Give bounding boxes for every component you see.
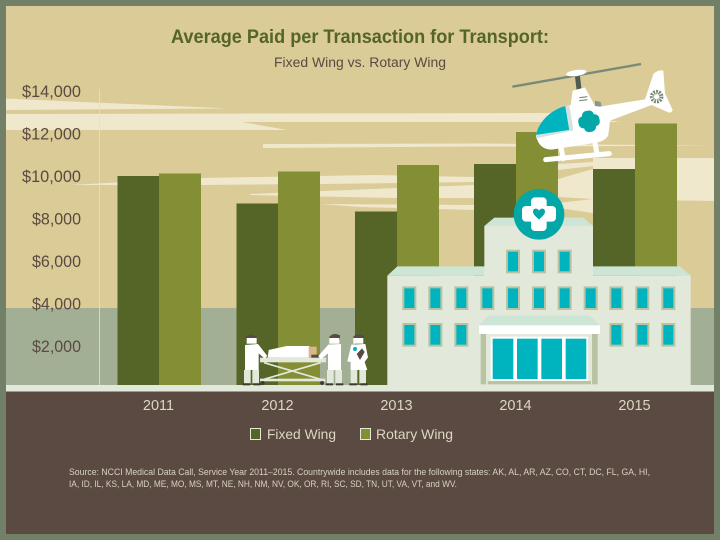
y axis labels: $8,000 — [32, 210, 81, 228]
legend: Fixed Wing — [267, 426, 336, 442]
stretcher — [260, 358, 326, 385]
hospital windows — [402, 250, 675, 347]
brown footer panel — [6, 392, 714, 534]
legend: Rotary Wing — [376, 426, 453, 442]
subtitle: Fixed Wing vs. Rotary Wing — [274, 55, 446, 70]
bar chart — [118, 124, 677, 385]
source note: Source: NCCI Medical Data Call, Service Year 2011–2015. Countrywide includes data for the following states: AK, AL, AR, AZ, CO, CT, DC, FL, GA, HI, — [69, 467, 650, 477]
source note: IA, ID, IL, KS, LA, MD, ME, MO, MS, MT, NE, NH, NM, NV, OK, OR, RI, SC, SD, TN, UT, VA, VT, and WV. — [69, 479, 457, 489]
helicopter cross — [577, 109, 601, 134]
title: Average Paid per Transaction for Transport: — [171, 26, 549, 48]
ground strip — [6, 385, 714, 392]
y axis labels: $2,000 — [32, 338, 81, 356]
hospital entrance — [479, 316, 600, 384]
legend — [250, 426, 453, 442]
y axis line — [98, 89, 100, 385]
helicopter — [512, 64, 673, 160]
x axis year labels — [143, 398, 651, 414]
medical team with stretcher — [243, 334, 368, 385]
source note — [69, 467, 650, 489]
y axis labels: $10,000 — [22, 168, 81, 186]
doctor with clipboard — [347, 334, 368, 385]
y axis labels: $4,000 — [32, 296, 81, 314]
x axis year labels: 2014 — [499, 398, 532, 414]
x axis year labels: 2013 — [380, 398, 413, 414]
y axis labels: $12,000 — [22, 126, 81, 144]
cream clouds — [6, 98, 714, 213]
y axis labels — [22, 83, 81, 356]
x axis year labels: 2011 — [143, 398, 174, 414]
tail rotor — [652, 92, 661, 101]
y axis labels: $14,000 — [22, 83, 81, 101]
medic left — [243, 335, 267, 385]
y axis labels: $6,000 — [32, 253, 81, 271]
x axis year labels: 2015 — [618, 398, 651, 414]
sage lower background band — [6, 308, 714, 386]
hospital badge: cross and heart — [514, 189, 564, 240]
patient — [268, 346, 319, 358]
medic right — [318, 334, 343, 385]
hospital — [387, 189, 691, 386]
x axis year labels: 2012 — [261, 398, 294, 414]
helicopter skids — [546, 142, 609, 160]
